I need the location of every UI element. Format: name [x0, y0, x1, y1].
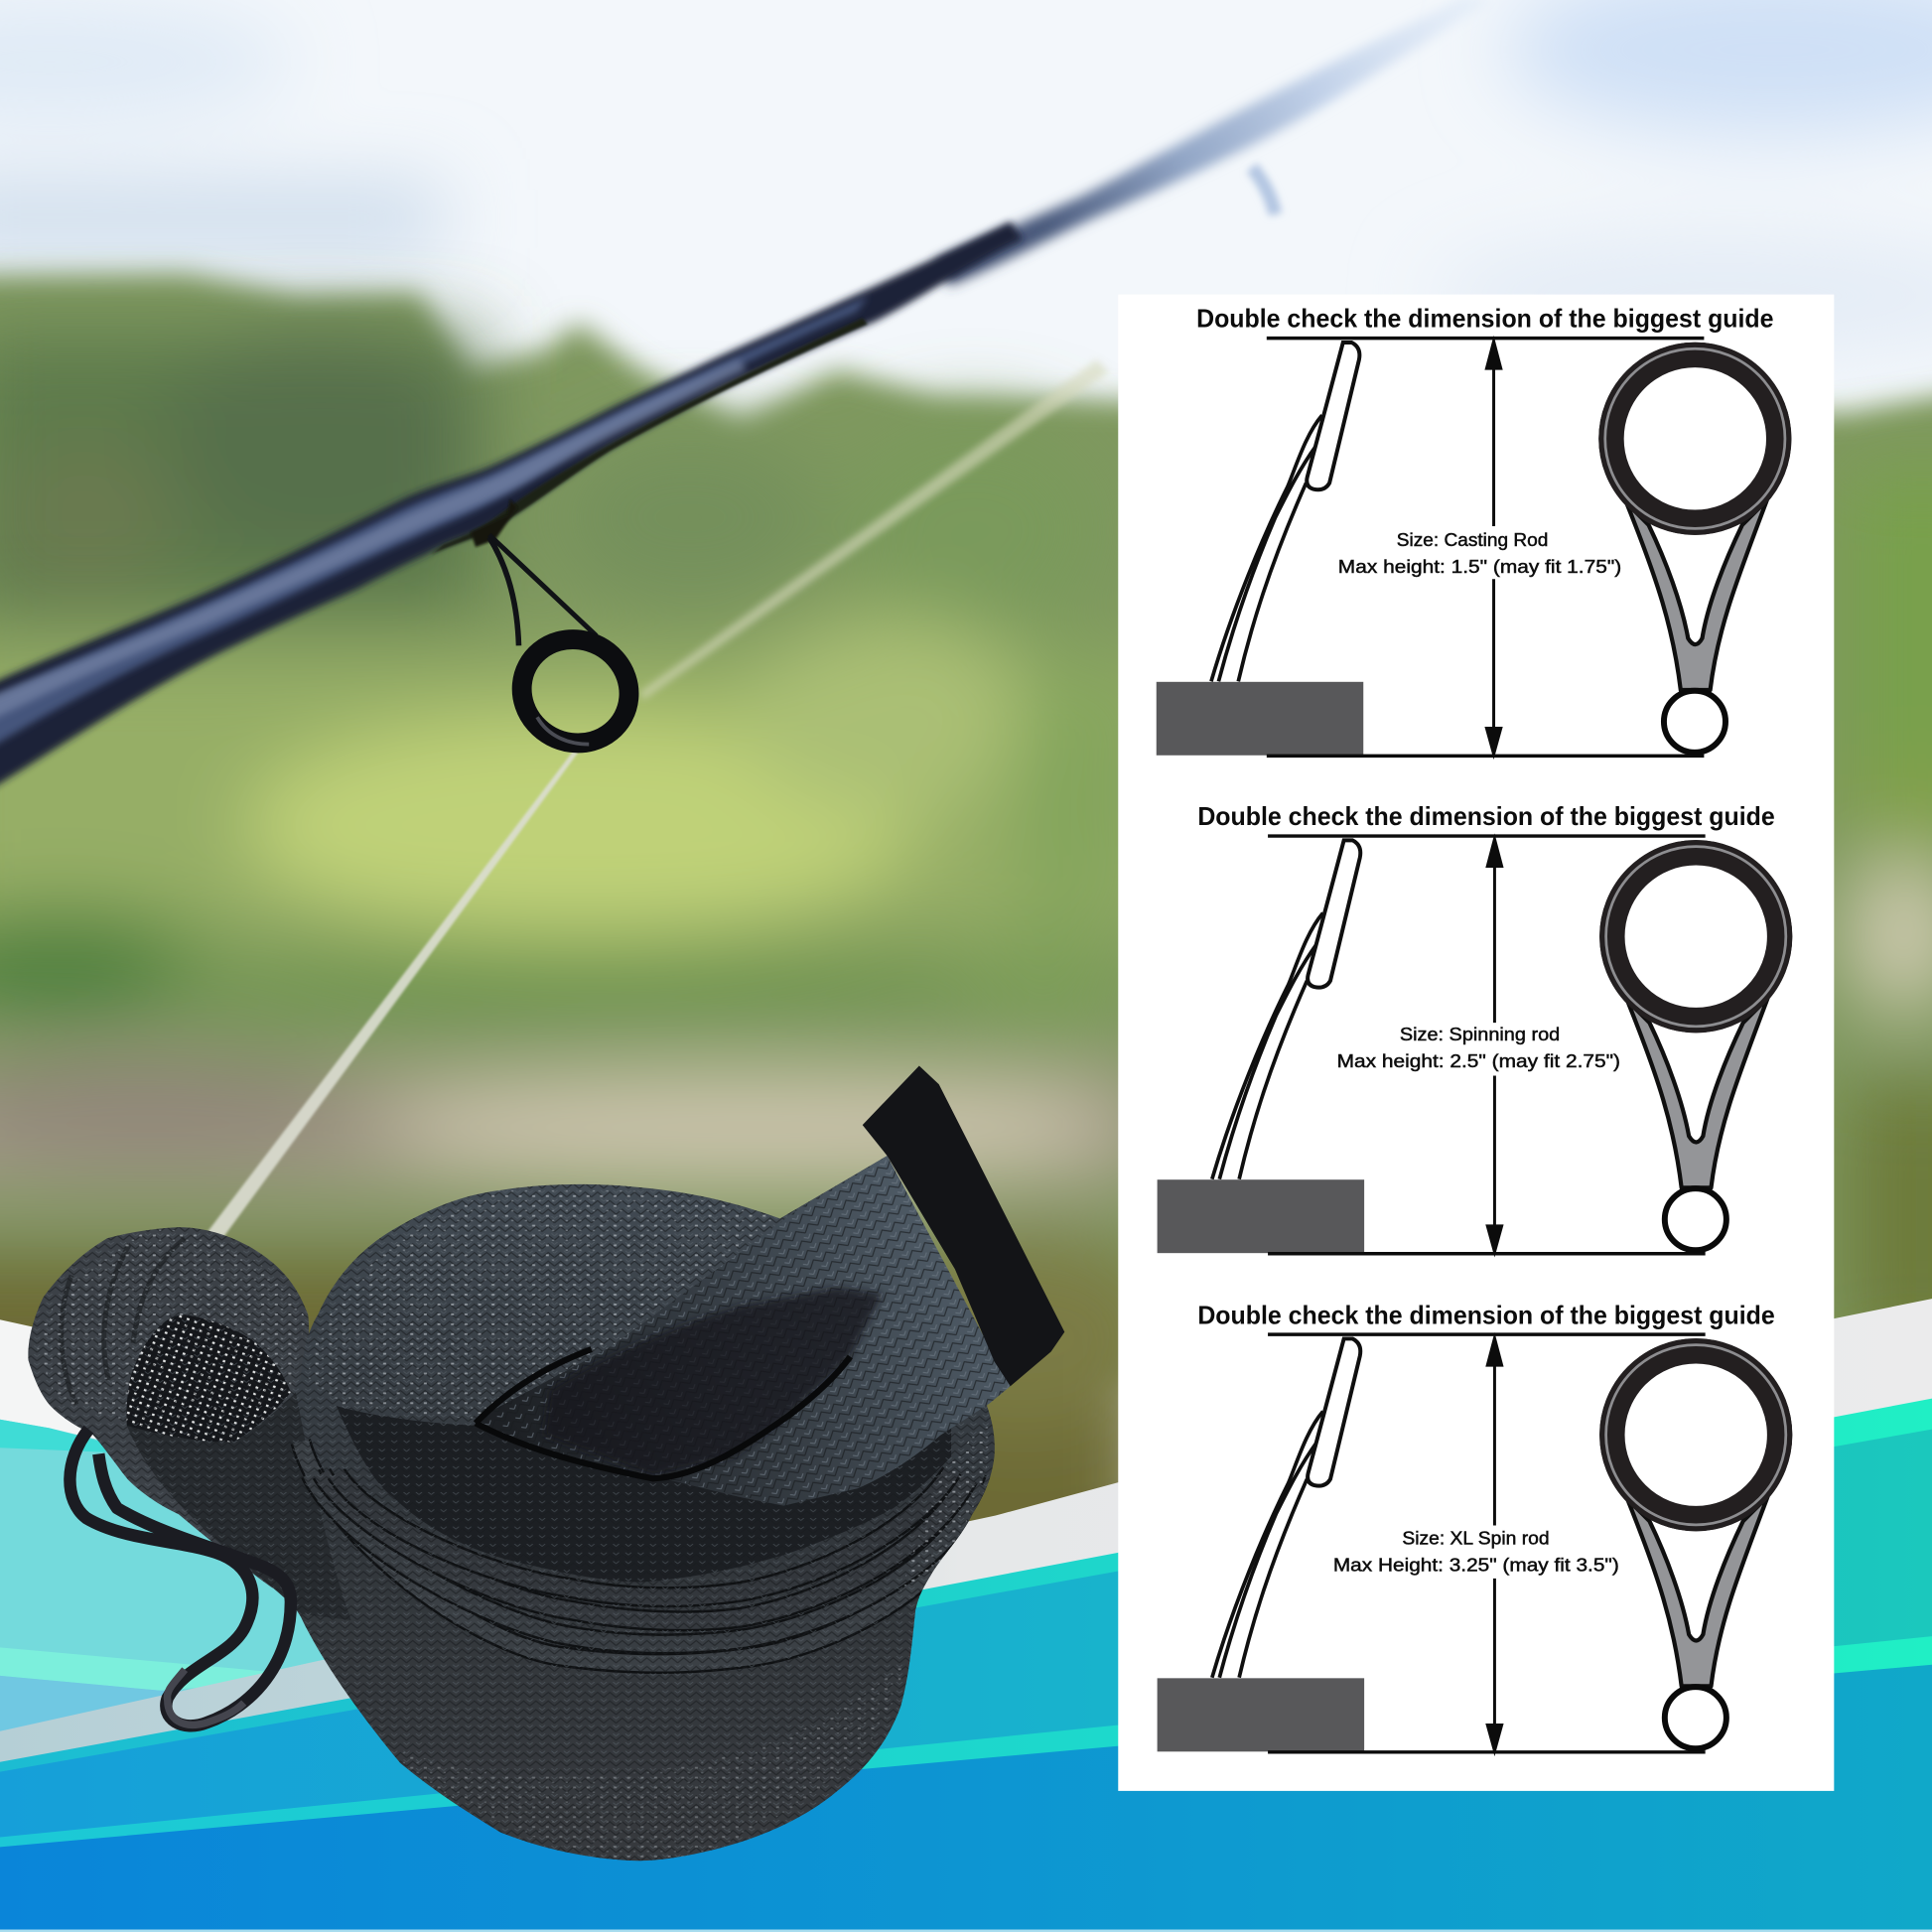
sock interior shadow	[337, 1406, 951, 1583]
top rule 2	[1268, 835, 1706, 837]
sock left gathered end	[28, 1227, 369, 1614]
size text 3: Max Height: 3.25" (may fit 3.5")	[1333, 1554, 1619, 1575]
arm weave	[476, 1156, 1011, 1506]
size text 2: Size: Spinning rod	[1400, 1024, 1560, 1044]
panel 3: XL spin rod	[1158, 1301, 1790, 1752]
arm dark fold	[543, 1288, 883, 1476]
base block 3	[1158, 1678, 1364, 1751]
sock upper arm	[476, 1156, 1011, 1506]
front view guide 2	[1601, 842, 1790, 1250]
heading 2: Double check the dimension of the biggest guide	[1197, 801, 1775, 831]
far rod tip	[936, 0, 1491, 286]
bottom rule 3	[1268, 1750, 1706, 1753]
size text 2	[1337, 1024, 1620, 1071]
heading 3: Double check the dimension of the biggest guide	[1197, 1301, 1775, 1330]
side view guide 3	[1212, 1338, 1360, 1678]
sock main body	[246, 1156, 995, 1861]
size text 1: Max height: 1.5" (may fit 1.75")	[1338, 556, 1621, 577]
size text 2: Max height: 2.5" (may fit 2.75")	[1337, 1050, 1620, 1071]
elastic cord worn tip	[167, 1670, 244, 1725]
white guide size panel	[1118, 295, 1834, 1791]
sock dark inner sweep	[127, 1392, 351, 1620]
base block 1	[1157, 682, 1363, 756]
guide foot	[471, 499, 517, 547]
perforated inner area	[127, 1314, 291, 1447]
elastic cord	[69, 1430, 291, 1725]
top rule 1	[1267, 337, 1704, 340]
far guide blur	[1252, 168, 1276, 214]
near rod shaft	[0, 221, 1023, 791]
bottom rule 1	[1267, 755, 1704, 758]
base block 2	[1158, 1179, 1364, 1253]
size text 3: Size: XL Spin rod	[1402, 1528, 1550, 1549]
sock velcro cuff	[863, 1066, 1064, 1386]
sock coil bands	[301, 1442, 995, 1663]
sock lower sheen specks	[400, 1657, 905, 1861]
bottom rule 2	[1268, 1252, 1706, 1255]
dimension arrow 2	[1487, 839, 1502, 1252]
size text 3	[1333, 1528, 1619, 1575]
size text 1: Size: Casting Rod	[1397, 529, 1548, 550]
side view guide 2	[1212, 840, 1360, 1179]
dimension arrow 3	[1487, 1338, 1502, 1751]
fishing rod	[0, 0, 1491, 791]
sock ball folds	[62, 1238, 185, 1405]
neoprene rod sock	[0, 1059, 1084, 1872]
weave texture	[28, 1159, 995, 1861]
size text 1	[1338, 529, 1621, 577]
panel 1: casting rod	[1157, 304, 1789, 756]
rod underside wrap	[431, 318, 868, 554]
panel 2: spinning rod	[1158, 801, 1790, 1254]
front view guide 1	[1600, 345, 1789, 753]
rod guide ring	[489, 535, 647, 761]
background waves	[0, 1299, 1932, 1932]
dimension arrow 1	[1486, 342, 1501, 755]
rod highlight	[0, 359, 747, 722]
fishing line	[205, 359, 1109, 1244]
rod blue lit band	[0, 296, 869, 750]
side view guide 1	[1211, 343, 1359, 681]
sock hem stitching	[476, 1349, 850, 1478]
heading 1: Double check the dimension of the biggest guide	[1196, 304, 1774, 334]
sock top sheen specks	[37, 1187, 991, 1595]
top rule 3	[1268, 1333, 1706, 1335]
front view guide 3	[1601, 1340, 1790, 1748]
